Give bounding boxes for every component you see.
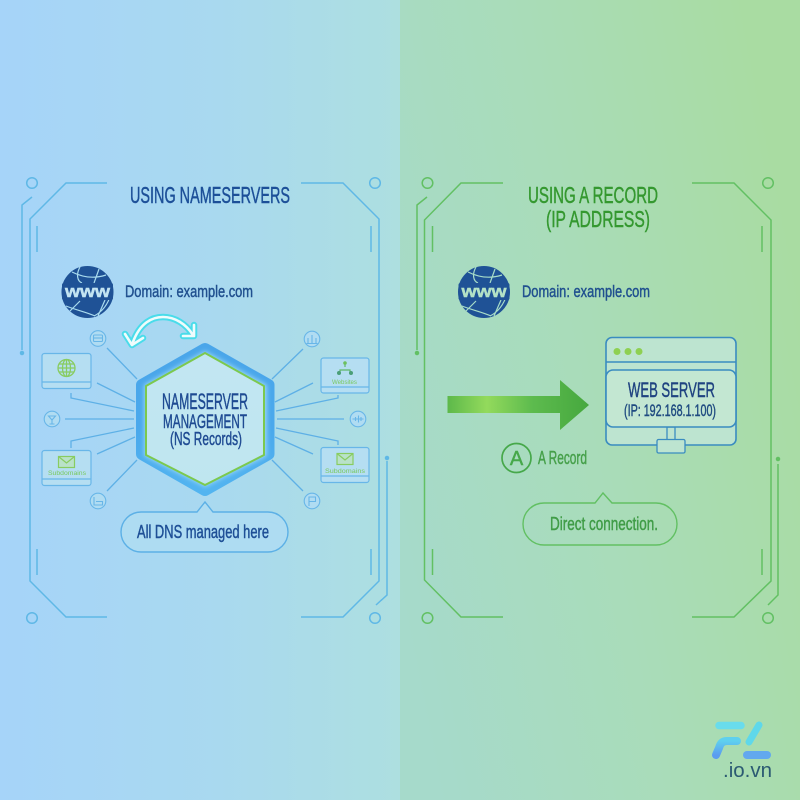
hexagon: nameserver management [142, 349, 268, 490]
panel: using nameservers [20, 178, 388, 623]
card: websites [321, 358, 369, 393]
callout: all DNS managed here: All DNS managed here [137, 522, 269, 542]
icon: www globe: www [64, 282, 111, 301]
heading: using nameservers: USING NAMESERVERS [130, 182, 290, 208]
card: subdomains left: Subdomains [48, 470, 87, 477]
card: globe [42, 354, 91, 388]
text: a record: A Record [538, 448, 587, 468]
web server monitor: (IP: 192.168.1.100) [624, 401, 716, 420]
text: NS records: (NS Records) [170, 429, 242, 449]
heading: using a record: USING A RECORD [528, 182, 658, 208]
card: subdomains left [42, 450, 91, 486]
logo: FL .io.vn: .io.vn [723, 760, 772, 782]
icon: A record badge [502, 444, 531, 472]
card: subdomains right [321, 448, 369, 482]
panel: using a record [416, 178, 780, 623]
icon: www globe [458, 266, 510, 318]
web server monitor: WEB SERVER [628, 379, 715, 402]
icon: curved double arrow [125, 317, 194, 345]
background: right green half [400, 0, 800, 800]
spoke lines [65, 348, 344, 491]
text: management label: MANAGEMENT [163, 412, 247, 433]
card: websites: Websites [332, 379, 358, 386]
icon: www globe: www [460, 282, 507, 301]
panel frame: a record circuit border [416, 178, 780, 623]
icon: www globe [62, 266, 113, 318]
background: left blue half [0, 0, 400, 800]
text: nameserver label: NAMESERVER [162, 389, 248, 414]
logo: FL .io.vn [716, 725, 772, 782]
arrow: direct to server [448, 380, 589, 430]
heading: using a record [528, 182, 658, 232]
text: domain: Domain: example.com [125, 282, 253, 301]
icon: A record badge: A [510, 448, 524, 470]
text: domain: Domain: example.com [522, 282, 650, 301]
callout: all DNS managed here [121, 502, 288, 552]
card: subdomains right: Subdomains [325, 468, 366, 475]
panel frame: nameservers circuit border [20, 178, 388, 623]
icons: small circular service icons [44, 331, 366, 509]
web server monitor [606, 338, 736, 453]
heading: using a record: (IP ADDRESS) [546, 206, 650, 232]
callout: direct connection [523, 493, 677, 545]
callout: direct connection: Direct connection. [550, 514, 658, 534]
